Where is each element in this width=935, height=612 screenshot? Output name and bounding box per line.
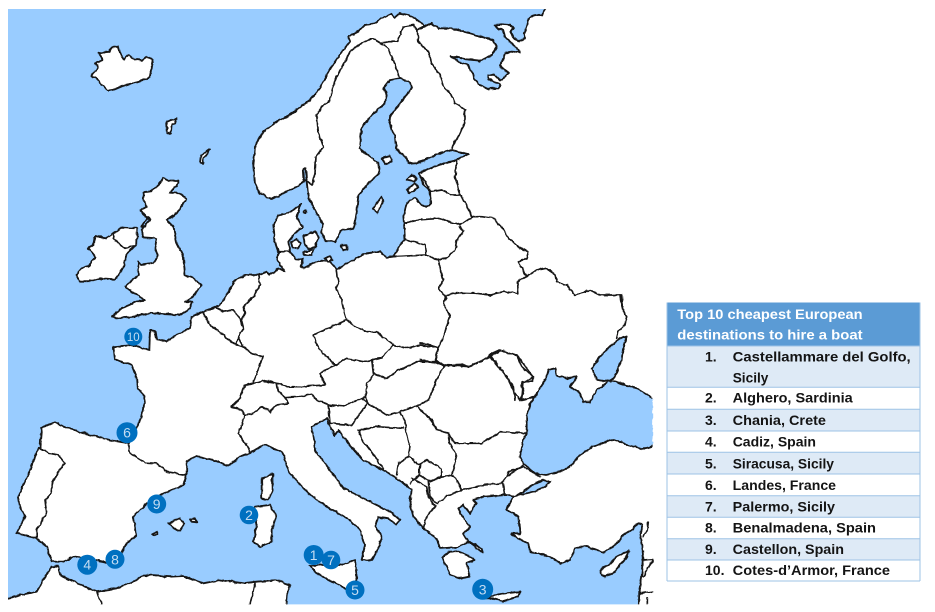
marker 7: Palermo [322, 551, 340, 569]
marker 6: Landes [116, 422, 138, 443]
marker 8: Benalmadena [106, 550, 124, 569]
marker 8: Benalmadena: 8 [111, 551, 119, 567]
Great Britain [112, 178, 201, 318]
row 4: 4. [705, 434, 717, 450]
marker 2: Alghero [240, 506, 258, 524]
marker 10: Cotes-d'Armor [124, 328, 142, 346]
borders: Alps, Balkans, Romania, Moldova [300, 350, 540, 528]
row 2: 2. [705, 390, 717, 406]
row 4: Cadiz, Spain [733, 434, 816, 450]
borders: Ukraine east and south [420, 295, 627, 400]
marker 10: Cotes-d'Armor: 10 [127, 332, 140, 344]
marker 4: Cadiz: 4 [83, 557, 91, 573]
table header: Top 10 cheapest European [677, 306, 863, 322]
North Africa [8, 564, 292, 604]
North Africa borders [97, 583, 255, 604]
row 3: Chania, Crete [733, 412, 826, 428]
marker 1: Castellammare del Golfo: 1 [310, 547, 318, 563]
Crete [482, 592, 520, 601]
row 10: 10. [705, 562, 724, 578]
sea background [0, 0, 655, 612]
marker 7: Palermo: 7 [327, 552, 335, 568]
Sea of Marmara [513, 480, 550, 497]
marker 5: Siracusa: 5 [351, 582, 359, 598]
marker 2: Alghero: 2 [245, 507, 253, 523]
row 7: Palermo, Sicily [733, 499, 835, 515]
row 6: 6. [705, 477, 717, 493]
marker 3: Chania [472, 579, 493, 600]
Levant borders [640, 522, 653, 605]
row 6: Landes, France [733, 477, 836, 493]
Hebrides [142, 217, 149, 227]
Northern Ireland border [113, 228, 137, 248]
row 1: 1. [705, 349, 717, 365]
marker 6: Landes: 6 [123, 425, 131, 441]
row 5: 5. [705, 455, 717, 471]
Sicily [310, 560, 357, 590]
Peloponnese [442, 552, 475, 578]
Iceland [92, 47, 153, 91]
Sea of Azov [592, 336, 627, 382]
marker 3: Chania: 3 [479, 581, 487, 597]
map of Europe [8, 9, 654, 604]
Black Sea [520, 368, 660, 475]
row 5: Siracusa, Sicily [733, 455, 834, 471]
Ireland [76, 228, 137, 282]
row 3: 3. [705, 412, 717, 428]
row 9: Castellon, Spain [733, 541, 844, 557]
table header [667, 302, 920, 346]
borders: central Europe [203, 252, 450, 387]
Cyprus [600, 551, 628, 577]
row 1: Castellammare del Golfo, [733, 349, 911, 365]
table rows [667, 302, 920, 581]
Faroe and Shetland islands [167, 118, 210, 163]
marker 5: Siracusa [346, 580, 364, 600]
Corsica, Sardinia, Balearics [152, 473, 276, 547]
borders: France, Spain, Portugal, Switzerland [37, 380, 300, 538]
row 9: 9. [705, 541, 717, 557]
table header: destinations to hire a boat [677, 326, 863, 342]
row 2: Alghero, Sardinia [733, 390, 853, 406]
marker 9: Castellon: 9 [153, 496, 161, 512]
row 8: Benalmadena, Spain [733, 519, 876, 535]
row 8: 8. [705, 519, 717, 535]
mainland Europe [15, 9, 656, 604]
destination markers [77, 328, 493, 600]
borders: Scandinavia, Baltic states, Belarus, Ukraine [305, 25, 623, 307]
row 1: Sicily [733, 369, 769, 385]
marker 9: Castellon [147, 494, 166, 514]
marker 4: Cadiz [77, 555, 97, 575]
row 10: Cotes-d’Armor, France [733, 562, 890, 578]
row 7: 7. [705, 499, 717, 515]
Baltic and Danish islands [291, 156, 418, 262]
row 1 [705, 349, 911, 385]
marker 1: Castellammare del Golfo [304, 545, 324, 565]
